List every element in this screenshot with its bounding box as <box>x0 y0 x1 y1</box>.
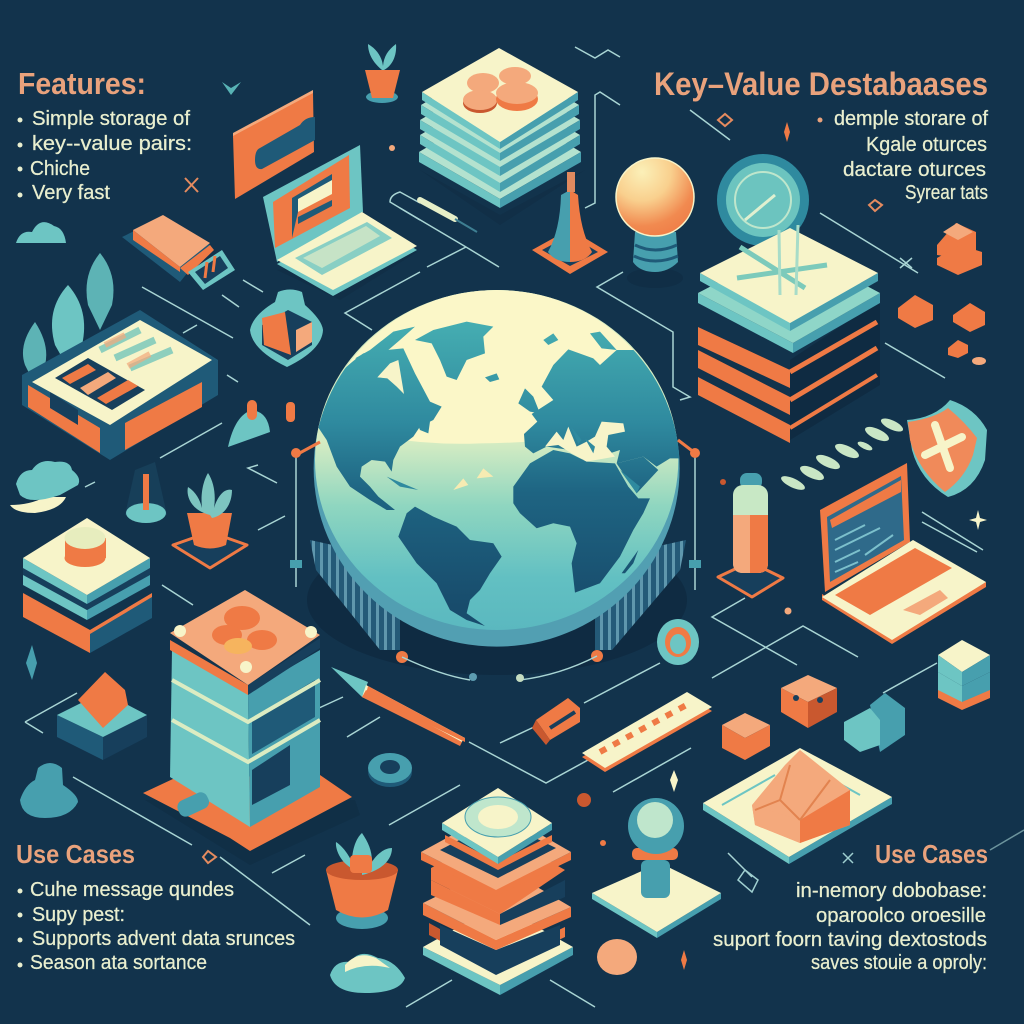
orange egg <box>597 939 637 975</box>
use cases list left <box>18 879 295 974</box>
bottle <box>718 473 783 597</box>
gauge <box>717 154 809 246</box>
right feature list: demple storare of <box>834 108 988 130</box>
use cases list left: Supy pest: <box>32 904 125 926</box>
board with orange cubes <box>703 748 892 864</box>
server stack: left <box>23 518 152 653</box>
big server tower <box>143 590 360 865</box>
teal connector block <box>844 693 905 752</box>
small orange device <box>122 215 235 290</box>
pen <box>420 200 477 232</box>
heading: use cases right: Use Cases <box>875 839 988 869</box>
right feature list: dactare oturces <box>843 159 986 181</box>
heading: features <box>18 66 192 204</box>
cloud: left <box>10 461 79 513</box>
globe pins <box>290 440 701 682</box>
orange cubes: right <box>898 223 986 365</box>
dome object <box>20 763 78 818</box>
continent: north america <box>313 348 442 510</box>
cloud: upper left <box>16 222 66 243</box>
globe <box>313 290 682 647</box>
pot plant: top <box>365 44 400 103</box>
use cases list left: Cuhe message qundes <box>30 879 234 901</box>
lens disc <box>657 619 699 665</box>
pot plant: bottom <box>326 833 398 929</box>
laptop: right <box>820 463 986 644</box>
globe pedestal <box>307 525 687 675</box>
small ornaments <box>185 82 987 970</box>
badge capsule <box>250 290 323 367</box>
features list: key--value pairs: <box>32 133 192 155</box>
orange die <box>781 675 837 728</box>
continent: greenland <box>415 322 493 380</box>
orange cube: small <box>722 713 770 760</box>
spark <box>26 645 37 680</box>
dashes row <box>779 416 905 493</box>
server stack: right <box>698 225 880 443</box>
bottom stack <box>421 788 573 995</box>
laptop: top left <box>263 145 417 300</box>
pot plant: left <box>173 473 247 568</box>
light bulb <box>616 158 694 288</box>
continent: eurasia <box>524 349 682 467</box>
use cases list right: suport foorn taving dextostods <box>713 929 987 951</box>
continent: arabia <box>617 457 658 493</box>
features list <box>18 108 192 204</box>
orange pill connector <box>532 698 580 745</box>
orange cylinder <box>64 527 106 567</box>
box: left <box>22 310 218 460</box>
right feature list <box>818 108 988 204</box>
continent: africa <box>513 450 650 593</box>
knife <box>331 667 465 746</box>
ruler <box>582 692 712 772</box>
knob joystick <box>592 798 721 938</box>
use cases list left: Supports advent data srunces <box>32 928 295 950</box>
orange discs <box>463 67 538 113</box>
ring coin <box>368 753 412 787</box>
use cases list right: oparoolco oroesille <box>816 905 986 927</box>
use cases list right: in-nemory dobobase: <box>796 880 987 902</box>
mediterranean and lakes <box>377 360 625 462</box>
plants: left <box>23 253 113 385</box>
shield <box>907 400 987 497</box>
server stack: top centre <box>419 48 585 225</box>
cloud: bottom <box>330 954 405 993</box>
mini stack: lower right <box>938 640 990 710</box>
glass dome <box>125 462 167 523</box>
orange panel <box>233 90 315 199</box>
features list: Chiche <box>30 158 90 180</box>
use cases list right <box>713 880 987 974</box>
continent: south america <box>398 507 502 626</box>
heading: use cases left <box>16 839 295 974</box>
heading: key-value databases: Key–Value Destabaases <box>654 66 988 102</box>
cone <box>532 172 608 274</box>
orange rock tile <box>57 672 147 760</box>
heading: use cases left: Use Cases <box>16 839 135 869</box>
heading: use cases right <box>713 839 988 974</box>
right feature list: Kgale oturces <box>866 134 987 156</box>
use cases list right: saves stouie a oproly: <box>811 952 987 974</box>
polar cream cap <box>347 290 646 444</box>
bell and pill <box>228 400 295 447</box>
features list: Simple storage of <box>32 108 190 130</box>
right feature list: Syrear tats <box>905 182 988 204</box>
heading: features: Features: <box>18 66 146 101</box>
features list: Very fast <box>32 182 110 204</box>
use cases list left: Season ata sortance <box>30 952 207 974</box>
heading: key-value databases <box>654 66 988 204</box>
